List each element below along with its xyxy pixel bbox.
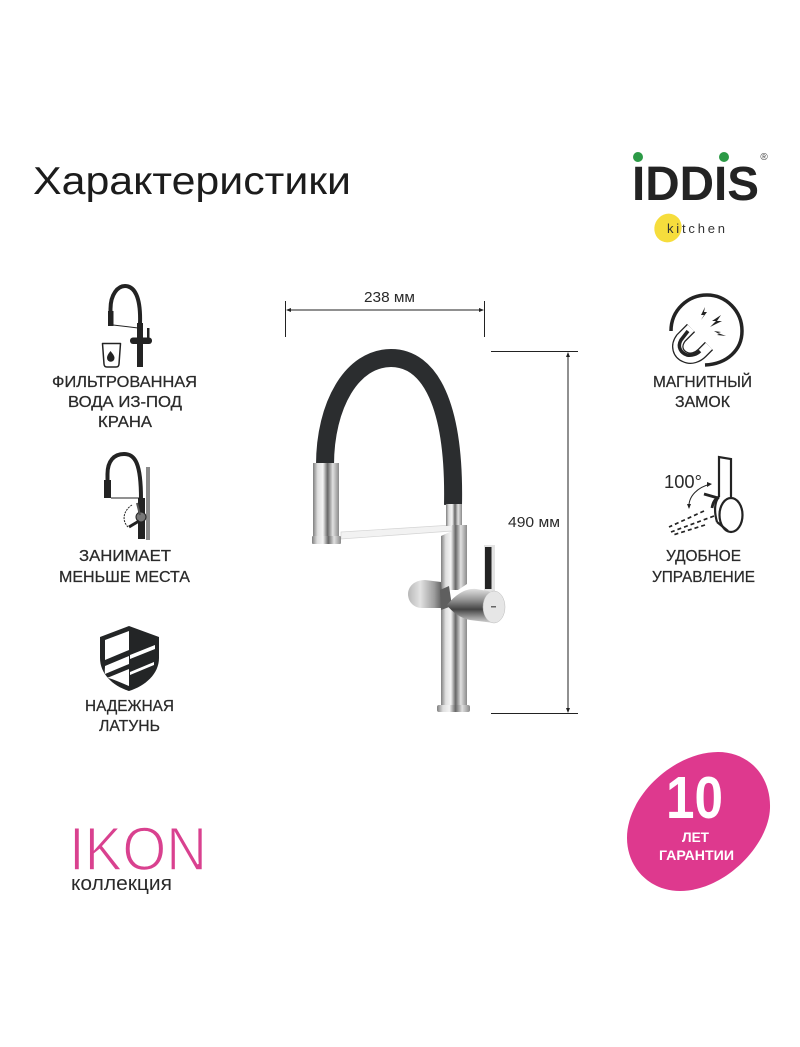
label: reliable brass — [85, 698, 174, 735]
label: magnetic lock — [653, 373, 752, 411]
spray head — [312, 463, 341, 544]
icon: convenient control 100 degrees: 100° — [664, 471, 702, 492]
lever — [484, 545, 495, 591]
sparks — [701, 307, 707, 320]
dimension: width 238 mm: 238 мм — [364, 290, 415, 306]
dimension: height 490 mm — [491, 352, 578, 714]
label: reliable brass: НАДЕЖНАЯ — [85, 698, 174, 715]
black flexible hose — [325, 358, 453, 505]
logo: IDDIS kitchen: IDDIS — [632, 158, 759, 211]
collection name: IKON: коллекция — [71, 873, 172, 895]
label: takes less space: МЕНЬШЕ МЕСТА — [59, 569, 191, 586]
label: magnetic lock: МАГНИТНЫЙ — [653, 373, 752, 391]
label: filtered water: ФИЛЬТРОВАННАЯ — [52, 374, 197, 391]
dimension: width 238 mm — [286, 290, 484, 337]
icon: convenient control 100 degrees — [664, 457, 742, 535]
label: convenient control: УДОБНОЕ — [666, 548, 741, 565]
label: convenient control — [652, 548, 755, 586]
white holder bar — [341, 525, 452, 539]
logo: IDDIS kitchen: kitchen — [667, 221, 725, 236]
main body — [437, 525, 470, 712]
label: filtered water: ВОДА ИЗ-ПОД — [68, 394, 183, 411]
label: filtered water: КРАНА — [98, 414, 153, 431]
crossing — [440, 586, 452, 610]
warranty badge — [627, 752, 770, 891]
dimension: height 490 mm: 490 мм — [508, 515, 560, 531]
label: takes less space: ЗАНИМАЕТ — [79, 548, 172, 565]
icon: magnetic lock — [671, 295, 742, 365]
label: takes less space — [59, 548, 191, 586]
logo: IDDIS kitchen: ® — [760, 152, 768, 163]
icon: brass shield — [100, 626, 159, 691]
left knob — [408, 580, 443, 608]
logo: IDDIS kitchen — [632, 152, 768, 247]
upper collar — [446, 504, 462, 526]
collection name: IKON: IKON — [69, 815, 207, 883]
handle cap — [483, 591, 505, 623]
right handle — [447, 589, 494, 623]
magnet — [678, 328, 709, 358]
label: convenient control: УПРАВЛЕНИЕ — [652, 569, 755, 586]
icon: takes less space — [104, 454, 150, 540]
faucet illustration — [312, 358, 505, 712]
icon: filtered water faucet — [102, 286, 152, 367]
icon: glass with drop — [102, 344, 120, 367]
label: filtered water — [52, 374, 197, 431]
label: magnetic lock: ЗАМОК — [675, 394, 730, 411]
warranty badge: ГАРАНТИИ — [659, 847, 734, 863]
warranty badge: 10 — [666, 765, 723, 831]
title: Характеристики — [33, 160, 351, 203]
warranty badge: ЛЕТ — [682, 829, 709, 845]
label: reliable brass: ЛАТУНЬ — [99, 718, 160, 735]
